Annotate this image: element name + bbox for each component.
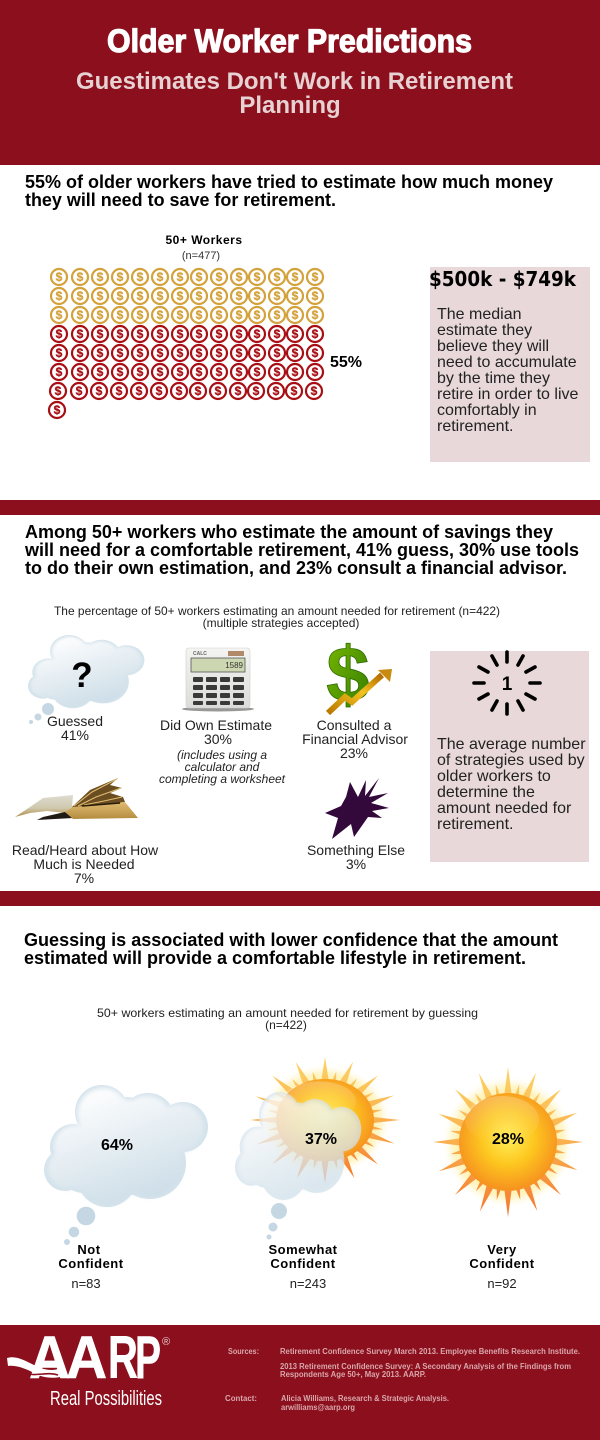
heading: section 2: Among 50+ workers who estimate the amount of savings they: [25, 522, 553, 542]
median description: comfortably in: [437, 402, 537, 419]
value: 28%: 28%: [492, 1131, 524, 1148]
footer band: [0, 1323, 600, 1440]
pictogram: red coins (55% estimators): [49, 326, 323, 418]
label: not confident: n=83: [71, 1276, 101, 1291]
label: read/heard: 7%: [74, 870, 94, 886]
value: 64%: 64%: [101, 1137, 133, 1154]
median description: estimate they: [437, 322, 532, 339]
logo: AARP: [7, 1323, 170, 1410]
median description: The median: [437, 306, 522, 323]
title: Older Worker Predictions: [107, 23, 472, 59]
logo: AARP: A: [29, 1325, 70, 1391]
heading: section 3: Guessing is associated with lower confidence that the amount: [24, 930, 558, 950]
label: did own estimate: completing a worksheet: [159, 772, 286, 786]
chart caption: strategies: (multiple strategies accepted): [203, 616, 359, 630]
label: not confident: Not: [77, 1242, 101, 1257]
label: something else: [307, 842, 405, 872]
chart caption: strategies: [54, 604, 500, 630]
label: guessed: [47, 713, 103, 743]
chart label: 50+ workers: 50+ Workers: [166, 233, 242, 247]
subtitle: Guestimates Don't Work in Retirement: [76, 68, 513, 95]
pictogram: gold coins (non-estimators): $$$$$$$$$$$$$$: [56, 308, 319, 322]
chart label: 50+ workers: (n=477): [182, 250, 220, 262]
heading: section 2: [24, 522, 579, 578]
heading: section 1: [25, 172, 553, 210]
label: consulted a financial advisor: Financial Advisor: [302, 731, 408, 747]
subtitle: Planning: [239, 92, 341, 119]
sources and contact: Alicia Williams, Research & Strategic Analysis.: [281, 1394, 449, 1403]
pictogram: gold coins (non-estimators): $$$$$$$$$$$$$$: [56, 270, 319, 284]
pictogram: red coins (55% estimators): $$$$$$$$$$$$$$: [56, 327, 319, 341]
label: did own estimate: (includes using a: [177, 748, 267, 762]
strategies description: amount needed for: [437, 800, 572, 817]
icon: thought cloud with question mark: [28, 635, 144, 724]
strategies description: retirement.: [437, 816, 513, 833]
label: very confident: n=92: [487, 1276, 517, 1291]
median description: need to accumulate: [437, 354, 577, 371]
strategies description: of strategies used by: [437, 752, 585, 769]
heading: section 3: [24, 930, 558, 968]
label: something else: 3%: [346, 856, 366, 872]
label: consulted a financial advisor: Consulted a: [317, 717, 392, 733]
icon: calculator: CALC: [193, 651, 207, 657]
median description: retirement.: [437, 418, 513, 435]
icon: dollar sign with rising arrow: [326, 630, 392, 718]
label: not confident: [58, 1242, 124, 1291]
label: read/heard: Read/Heard about How: [12, 842, 159, 858]
chart caption: strategies: The percentage of 50+ workers estimating an amount needed for retirement (n=422): [54, 604, 500, 618]
pictogram: gold coins (non-estimators): [51, 269, 323, 323]
label: guessed: 41%: [61, 727, 89, 743]
sources and contact: Sources:: [228, 1347, 259, 1356]
heading: section 1: 55% of older workers have tried to estimate how much money: [25, 172, 553, 192]
logo: AARP: P: [135, 1323, 161, 1391]
heading: section 3: estimated will provide a comfortable lifestyle in retirement.: [24, 948, 526, 968]
55% label: 55%: [330, 354, 362, 371]
strategies description: determine the: [437, 784, 535, 801]
label: somewhat confident: n=243: [290, 1276, 326, 1291]
logo: AARP: Real Possibilities: [50, 1388, 162, 1410]
median description: retire in order to live: [437, 386, 578, 403]
icon: open book: [15, 778, 138, 820]
sources and contact: 2013 Retirement Confidence Survey: A Secondary Analysis of the Findings from: [280, 1362, 571, 1371]
pictogram: red coins (55% estimators): $$$$$$$$$$$$$$: [56, 365, 319, 379]
label: did own estimate: calculator and: [185, 760, 260, 774]
icon: radiating number one: [474, 652, 540, 714]
icon: calculator: [182, 648, 254, 712]
pictogram: red coins (55% estimators): $$$$$$$$$$$$$$: [55, 384, 318, 398]
label: read/heard: Much is Needed: [33, 856, 135, 872]
panel: average number of strategies: [430, 651, 589, 862]
label: not confident: Confident: [58, 1256, 124, 1271]
label: somewhat confident: Somewhat: [268, 1242, 338, 1257]
strategies description: [437, 736, 586, 833]
label: read/heard: [12, 842, 159, 886]
icon: calculator: 1589: [225, 661, 244, 670]
sources and contact: arwilliams@aarp.org: [281, 1403, 355, 1412]
sources and contact: Retirement Confidence Survey March 2013. Employee Benefits Research Institute.: [280, 1347, 580, 1356]
logo: AARP: A: [66, 1325, 107, 1391]
icon: sun behind cloud, somewhat confident: [235, 1053, 405, 1240]
subtitle: [76, 68, 513, 119]
label: very confident: Very: [487, 1242, 517, 1257]
label: guessed: Guessed: [47, 713, 103, 729]
median description: by the time they: [437, 370, 550, 387]
median description: [437, 306, 578, 435]
label: did own estimate: 30%: [204, 731, 232, 747]
divider band 1: [0, 500, 600, 515]
value: 37%: 37%: [305, 1131, 337, 1148]
label: something else: Something Else: [307, 842, 405, 858]
header band: [0, 0, 600, 165]
icon: sun, very confident: [428, 1062, 588, 1222]
chart caption: guessing: [97, 1006, 478, 1032]
panel: median estimate: [429, 267, 590, 462]
label: very confident: Confident: [469, 1256, 535, 1271]
heading: section 1: they will need to save for retirement.: [25, 190, 336, 210]
label: somewhat confident: Confident: [270, 1256, 336, 1271]
pictogram: red coins (55% estimators): $: [54, 403, 61, 417]
divider band 2: [0, 891, 600, 906]
label: somewhat confident: [268, 1242, 338, 1291]
label: consulted a financial advisor: 23%: [340, 745, 368, 761]
icon: dollar sign with rising arrow: $: [326, 630, 370, 718]
pictogram: red coins (55% estimators): $$$$$$$$$$$$$$: [56, 346, 319, 360]
logo: AARP: ®: [162, 1336, 170, 1348]
median value: $500k - $749k: [429, 267, 577, 291]
strategies description: older workers to: [437, 768, 551, 785]
icon: radiating number one: 1: [502, 674, 513, 695]
chart caption: guessing: (n=422): [265, 1018, 307, 1032]
median description: believe they will: [437, 338, 549, 355]
label: did own estimate: Did Own Estimate: [160, 717, 272, 733]
chart label: 50+ workers: [166, 233, 242, 262]
heading: section 2: will need for a comfortable retirement, 41% guess, 30% use tools: [24, 540, 579, 560]
sources and contact: Contact:: [225, 1394, 257, 1403]
label: very confident: [469, 1242, 535, 1291]
icon: thought cloud with question mark: ?: [71, 656, 93, 695]
icon: large cloud, not confident: [44, 1085, 208, 1245]
strategies description: The average number: [437, 736, 586, 753]
heading: section 2: to do their own estimation, and 23% consult a financial advisor.: [25, 558, 567, 578]
icon: starburst: [325, 778, 389, 839]
sources and contact: Respondents Age 50+, May 2013. AARP.: [280, 1370, 426, 1379]
label: did own estimate: [159, 717, 286, 786]
label: consulted a financial advisor: [302, 717, 408, 761]
logo: AARP: R: [108, 1323, 138, 1391]
sources and contact: [225, 1347, 580, 1412]
pictogram: gold coins (non-estimators): $$$$$$$$$$$$$$: [56, 289, 319, 303]
chart caption: guessing: 50+ workers estimating an amount needed for retirement by guessing: [97, 1006, 478, 1020]
